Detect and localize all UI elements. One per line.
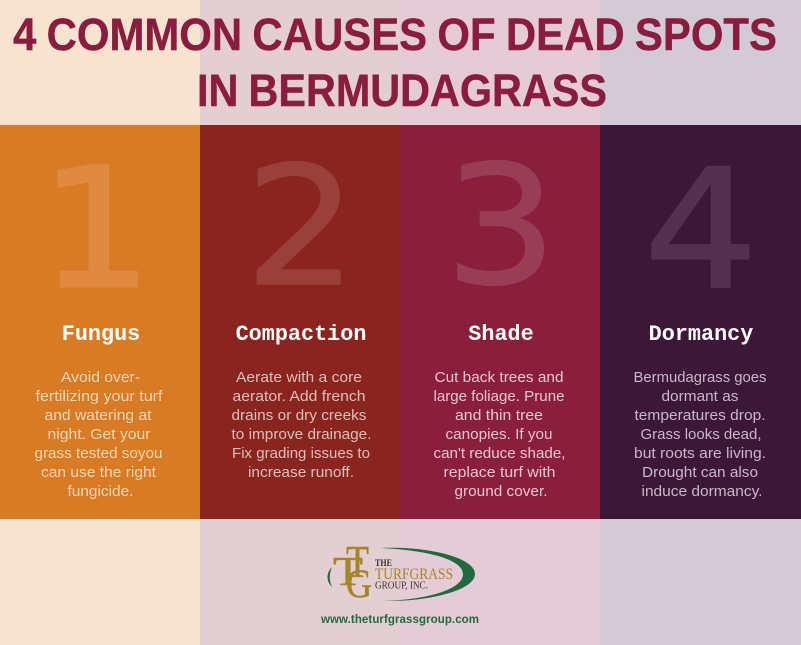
text: dormancy advice: induce dormancy.: [642, 483, 762, 500]
heading: dormancy: Dormancy: [649, 322, 753, 347]
number 1: 1: [40, 133, 152, 325]
heading: shade: Shade: [468, 322, 534, 347]
text: shade advice: ground cover.: [454, 483, 548, 500]
text: fungus advice: Avoid over-: [61, 369, 140, 386]
text: dormancy advice: Drought can also: [642, 464, 758, 481]
text: compaction advice: drains or dry creeks: [232, 407, 366, 424]
text: dormancy advice: temperatures drop.: [634, 407, 766, 424]
panel: compaction: [200, 125, 400, 519]
text: fungus advice: night. Get your: [48, 426, 151, 443]
text: dormancy advice: but roots are living.: [634, 445, 766, 462]
panel: fungus: [0, 125, 200, 519]
logo wordmark: [375, 559, 453, 592]
logo wordmark: THE: [375, 559, 392, 569]
text: dormancy advice: Grass looks dead,: [640, 426, 762, 443]
text: compaction advice: to improve drainage.: [232, 426, 372, 443]
icon: TTG monogram: T: [346, 537, 369, 587]
text: dormancy advice: Bermudagrass goes: [634, 369, 766, 386]
number 2: 2: [244, 131, 358, 323]
number 3: 3: [444, 130, 558, 322]
text: shade advice: Cut back trees and: [434, 369, 564, 386]
text: compaction advice: Fix grading issues to: [232, 445, 370, 462]
number 4: 4: [644, 134, 758, 326]
text: fungus advice: can use the right: [41, 464, 157, 481]
text: dormancy advice: dormant as: [662, 388, 738, 405]
icon: TTG monogram: T: [333, 548, 363, 594]
text: fungus advice: and watering at: [44, 407, 152, 424]
text: shade advice: and thin tree: [455, 407, 543, 424]
logo: The Turfgrass Group: [320, 537, 479, 626]
text: fungus advice: grass tested soyou: [34, 445, 162, 462]
panel: dormancy: [600, 125, 801, 519]
logo wordmark: TURFGRASS: [375, 566, 453, 583]
text: shade advice: can't reduce shade,: [434, 445, 566, 462]
heading: compaction: Compaction: [236, 322, 366, 347]
text: dormancy advice: [634, 369, 766, 500]
text: shade advice: canopies. If you: [446, 426, 552, 443]
panel: shade: [400, 125, 600, 519]
icon: green swoosh: [328, 548, 475, 601]
text: shade advice: replace turf with: [444, 464, 556, 481]
text: compaction advice: [232, 369, 372, 481]
website url: www.theturfgrassgroup.com: [320, 614, 479, 626]
text: fungus advice: [34, 369, 163, 500]
text: compaction advice: Aerate with a core: [236, 369, 362, 386]
text: shade advice: [434, 369, 566, 500]
logo wordmark: GROUP, INC.: [375, 580, 428, 592]
icon: TTG monogram: G: [346, 561, 372, 606]
icon: TTG monogram: [333, 537, 372, 606]
title: [13, 9, 777, 116]
title: IN BERMUDAGRASS: [197, 65, 607, 116]
text: compaction advice: aerator. Add french: [232, 388, 366, 405]
text: fungus advice: fungicide.: [68, 483, 134, 500]
text: fungus advice: fertilizing your turf: [36, 388, 163, 405]
heading: fungus: Fungus: [62, 322, 140, 347]
text: shade advice: large foliage. Prune: [434, 388, 564, 405]
text: compaction advice: increase runoff.: [248, 464, 354, 481]
